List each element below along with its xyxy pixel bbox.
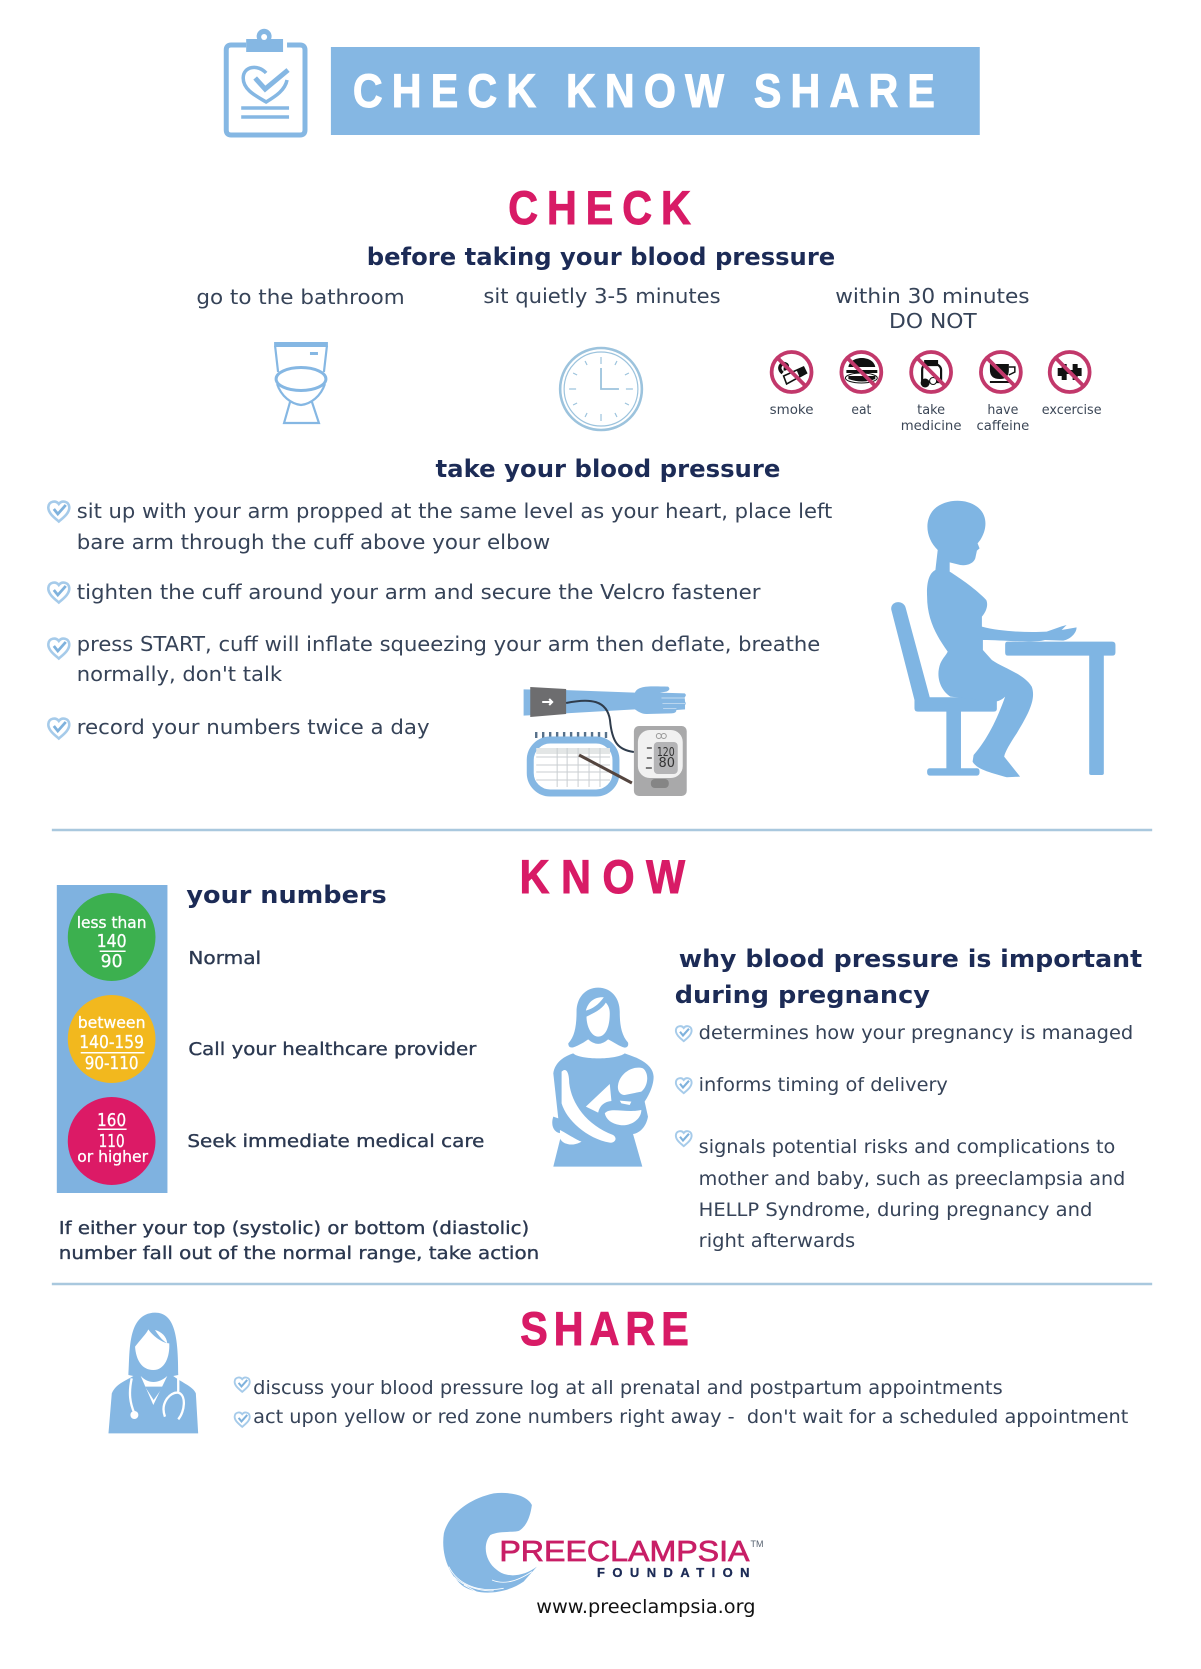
label: take medicine xyxy=(901,403,962,434)
icon: clock xyxy=(560,348,642,430)
label: have caffeine: caffeine xyxy=(976,419,1029,434)
zone: red: 110 xyxy=(99,1131,125,1152)
step: sit quietly: sit quietly 3-5 minutes xyxy=(483,284,721,308)
item: signals xyxy=(676,1131,1125,1252)
item: discuss: discuss your blood pressure log at all prenatal and postpartum appointments xyxy=(253,1377,1003,1399)
heading: why blood pressure is important during pregnancy xyxy=(675,945,1142,1009)
illustration: arm, cuff, log and monitor: 80 xyxy=(659,756,675,771)
icon: doctor with stethoscope xyxy=(108,1313,198,1433)
subheading: before taking your blood pressure: before taking your blood pressure xyxy=(367,243,835,271)
item: signals: signals potential risks and complications to xyxy=(699,1136,1115,1158)
icon: no eating xyxy=(841,352,881,392)
zone: green xyxy=(68,893,155,981)
label: have caffeine: have xyxy=(987,403,1018,418)
section heading: KNOW: KNOW xyxy=(520,852,685,904)
icon: toilet xyxy=(274,342,328,423)
item: determines: determines how your pregnancy is managed xyxy=(699,1022,1133,1044)
zone: red: 160 xyxy=(97,1110,126,1131)
item 3: press START, cuff will inflate squeezing your arm then deflate, breathe xyxy=(77,632,820,656)
subheading: take your blood pressure: take your blood pressure xyxy=(436,455,780,483)
item 2: tighten the cuff around your arm and secure the Velcro fastener xyxy=(77,580,761,604)
table xyxy=(1005,642,1115,775)
item: signals: mother and baby, such as preeclampsia and xyxy=(699,1168,1125,1190)
chair xyxy=(891,602,997,776)
item 1: sit up with your arm propped at the same level as your heart, place left xyxy=(77,499,832,523)
icon: mother holding baby xyxy=(552,988,654,1167)
step: within 30 minutes do not: DO NOT xyxy=(889,309,978,333)
item 4: record your numbers twice a day xyxy=(77,715,430,739)
zone: red xyxy=(68,1097,155,1185)
item: act upon: act upon yellow or red zone numbers right away - don't wait for a scheduled appointment xyxy=(253,1406,1128,1428)
label: have caffeine xyxy=(976,403,1029,434)
heading: why blood pressure is important during pregnancy: during pregnancy xyxy=(675,981,930,1009)
zone: green: 140 xyxy=(97,931,127,952)
icon: no medicine xyxy=(911,352,951,392)
item: informs: informs timing of delivery xyxy=(699,1074,948,1096)
zone text: call your healthcare provider: Call your healthcare provider xyxy=(188,1039,477,1060)
icon: no exercise xyxy=(1050,352,1090,392)
checklist: share xyxy=(235,1377,1128,1428)
item 3: normally, don't talk xyxy=(77,662,283,686)
item 3 xyxy=(48,632,820,686)
item: signals: right afterwards xyxy=(699,1230,855,1252)
step: go to the bathroom: go to the bathroom xyxy=(196,285,405,309)
zone: yellow xyxy=(68,995,155,1083)
logo wordmark: PREECLAMPSIA xyxy=(499,1536,750,1568)
section heading: CHECK: CHECK xyxy=(508,183,691,235)
checklist: take your blood pressure xyxy=(48,499,832,739)
note: take action: number fall out of the normal range, take action xyxy=(59,1243,539,1264)
checklist: why it is important xyxy=(676,1022,1133,1252)
zone text: normal: Normal xyxy=(188,948,261,969)
illustration: arm, cuff, log and monitor: 120 xyxy=(657,745,675,759)
label: take medicine: take xyxy=(917,403,945,418)
label: eat: eat xyxy=(851,403,871,418)
zone: yellow: 140-159 xyxy=(79,1032,144,1053)
note: take action xyxy=(59,1218,539,1264)
logo: Preeclampsia Foundation xyxy=(443,1493,763,1594)
arm and hand xyxy=(524,686,686,716)
item 1: bare arm through the cuff above your elbow xyxy=(77,530,550,554)
title banner xyxy=(331,47,980,135)
illustration: seated woman at table xyxy=(891,501,1115,777)
zone: red: or higher xyxy=(77,1147,148,1166)
label: smoke: smoke xyxy=(770,403,814,418)
panel: blood pressure zones xyxy=(57,885,167,1193)
step: within 30 minutes do not: within 30 minutes xyxy=(835,284,1030,308)
logo swoosh xyxy=(443,1493,537,1594)
zone: yellow: 90-110 xyxy=(85,1053,139,1074)
heading: your numbers: your numbers xyxy=(186,881,387,909)
illustration: arm, cuff, log and monitor xyxy=(524,686,687,796)
website url: www.preeclampsia.org xyxy=(536,1596,755,1618)
item: signals: HELLP Syndrome, during pregnancy and xyxy=(699,1199,1092,1221)
zone text: seek immediate medical care: Seek immediate medical care xyxy=(187,1131,484,1152)
logo sub-wordmark: FOUNDATION xyxy=(597,1565,750,1580)
section heading: SHARE: SHARE xyxy=(520,1304,689,1356)
note: take action: If either your top (systolic) or bottom (diastolic) xyxy=(59,1218,529,1239)
trademark: TM xyxy=(751,1539,763,1549)
title banner: CHECK KNOW SHARE xyxy=(353,66,935,118)
step: within 30 minutes do not xyxy=(835,284,1030,333)
icon: clipboard with heart check xyxy=(226,29,305,135)
label: take medicine: medicine xyxy=(901,419,962,434)
zone: green: less than xyxy=(77,913,147,932)
woman silhouette xyxy=(927,501,1077,777)
item 1 xyxy=(48,499,832,554)
heading: why blood pressure is important during pregnancy: why blood pressure is important xyxy=(679,945,1142,973)
zone: green: 90 xyxy=(101,951,123,972)
icon: no smoking xyxy=(772,352,812,392)
icon: no caffeine xyxy=(981,352,1021,392)
zone: yellow: between xyxy=(78,1013,146,1032)
icon row: do not list xyxy=(770,352,1102,434)
label: excercise: excercise xyxy=(1042,403,1102,418)
